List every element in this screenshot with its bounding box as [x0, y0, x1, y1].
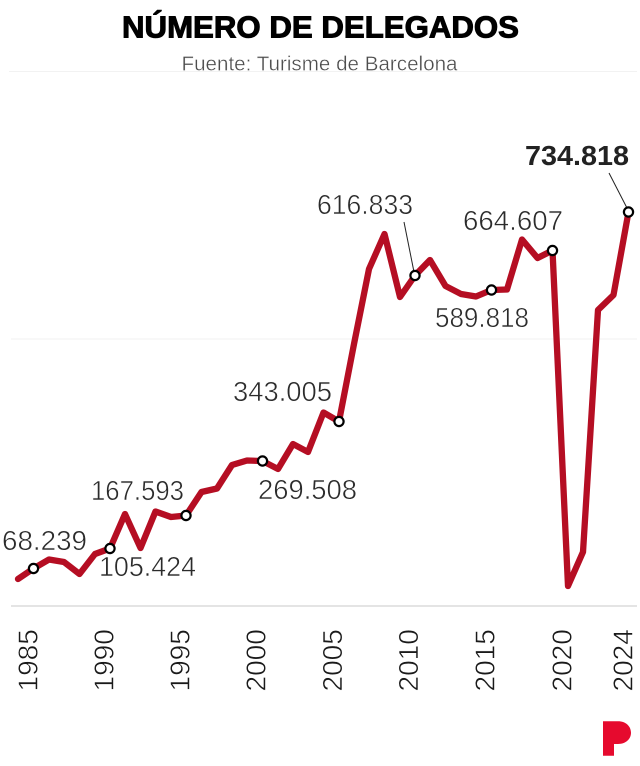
data labels: 167.593: [91, 475, 184, 506]
x axis year labels: 1995: [164, 629, 196, 692]
data labels: [2, 140, 629, 582]
data labels: 734.818: [525, 140, 629, 171]
x axis year labels: 1990: [88, 629, 120, 692]
line chart: [2, 140, 638, 692]
x axis year labels: 2005: [317, 629, 348, 692]
x axis year labels: 2020: [546, 629, 578, 692]
data labels: 68.239: [2, 525, 87, 556]
data labels: 616.833: [317, 189, 413, 220]
data labels: 664.607: [463, 205, 563, 236]
x axis year labels: 1985: [12, 629, 44, 692]
logo: [603, 721, 631, 756]
title: NÚMERO DE DELEGADOS: [122, 8, 519, 44]
data point markers: [29, 207, 633, 573]
x axis year labels: 2015: [470, 629, 500, 692]
x axis year labels: [12, 629, 638, 692]
x axis year labels: 2000: [240, 629, 272, 692]
subtitle: source: Fuente: Turisme de Barcelona: [182, 54, 458, 76]
data labels: 105.424: [99, 551, 196, 582]
data labels: 343.005: [233, 376, 332, 407]
data line: [18, 212, 628, 586]
x axis year labels: 2010: [393, 629, 424, 692]
data labels: 589.818: [435, 302, 529, 333]
data labels: 269.508: [258, 474, 357, 505]
leader lines: [404, 173, 627, 272]
x axis year labels: 2024: [608, 629, 638, 692]
